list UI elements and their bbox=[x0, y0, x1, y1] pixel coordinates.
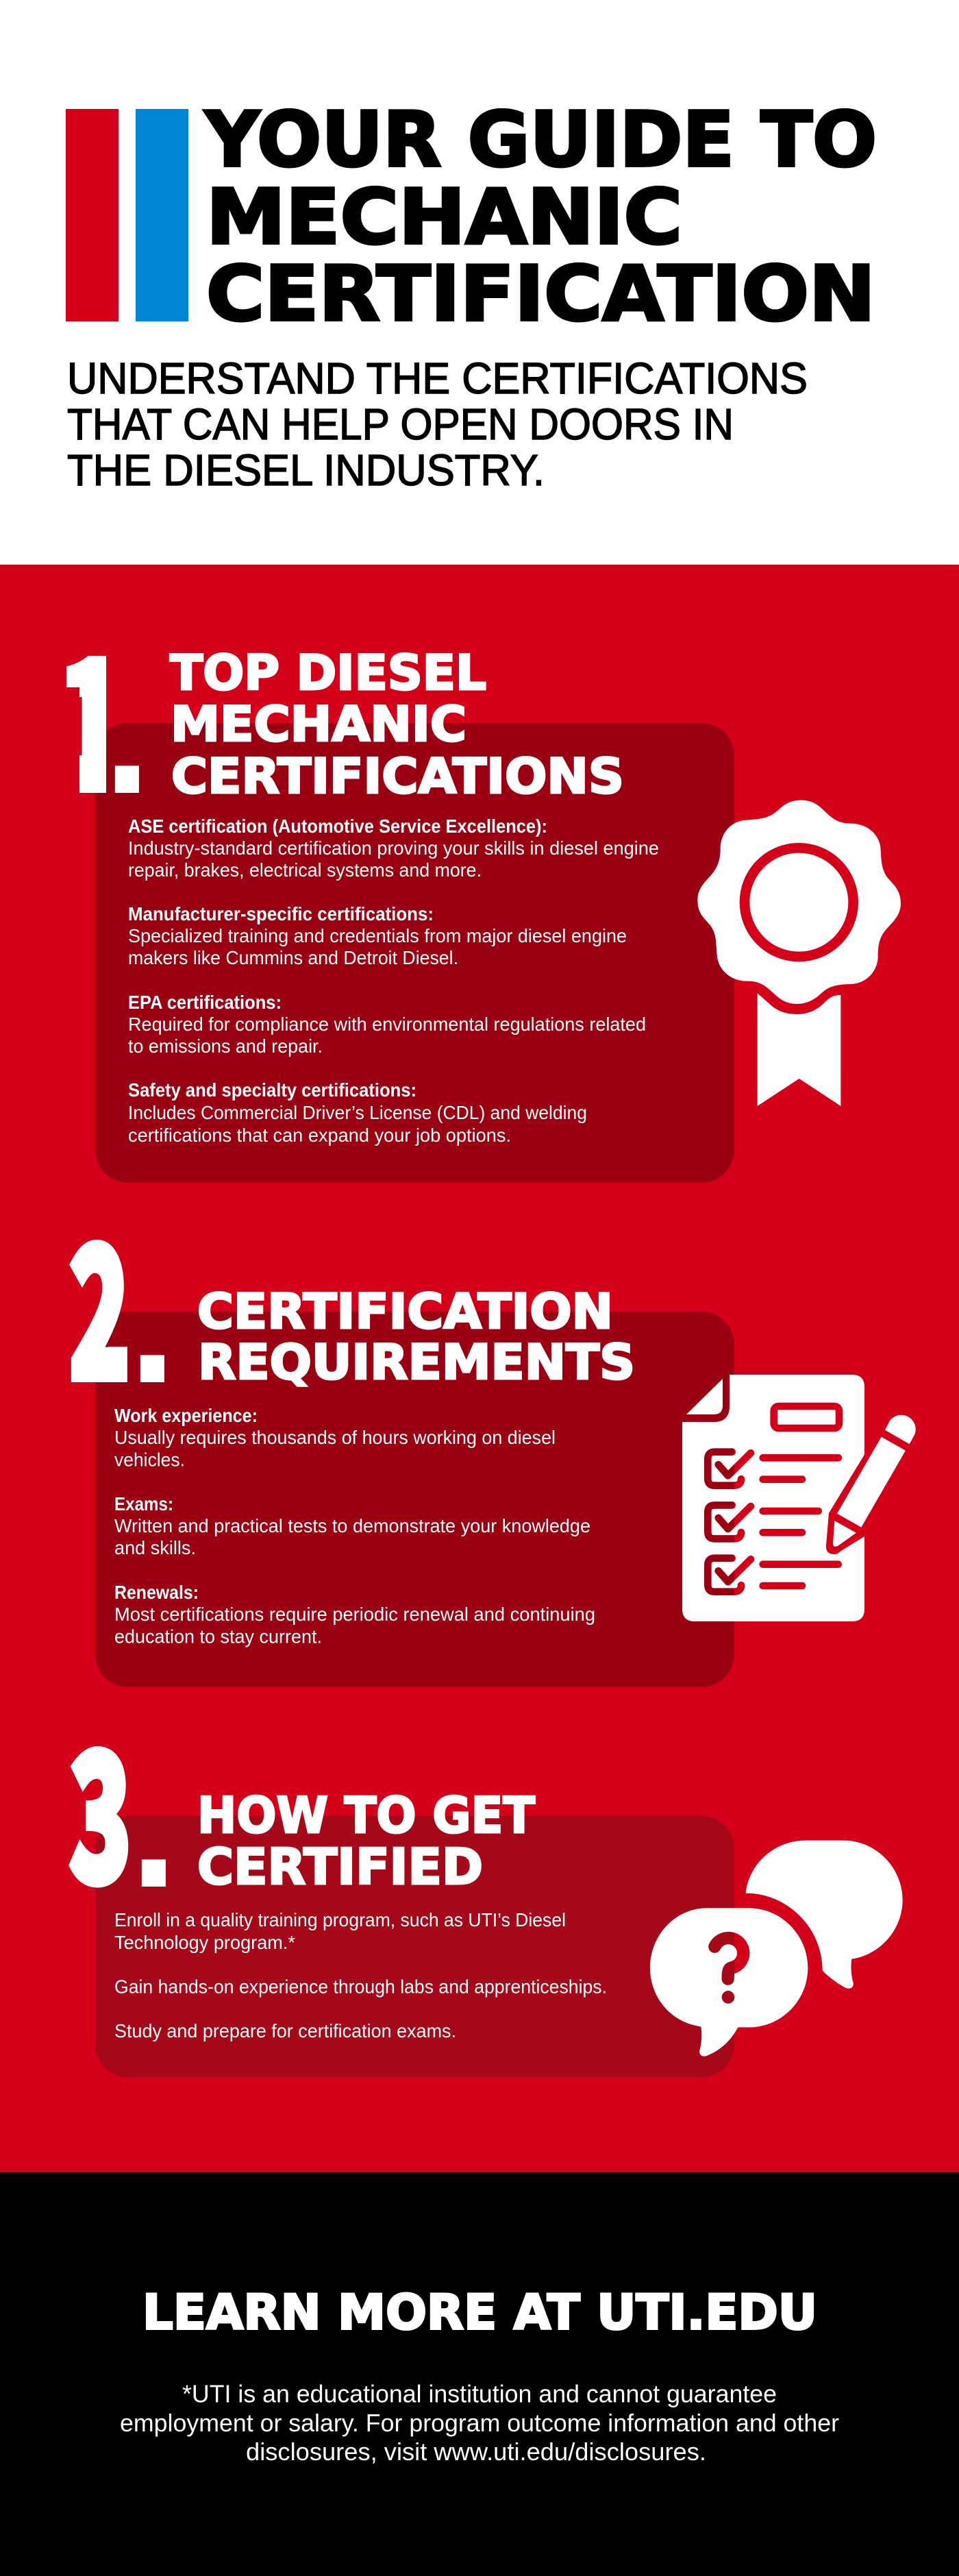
header section bbox=[0, 0, 959, 565]
title: CERTIFICATION bbox=[206, 250, 875, 339]
section 2: certification requirements bbox=[69, 1168, 916, 1687]
text: certification list: to emissions and repair. bbox=[128, 1035, 323, 1057]
disclaimer: employment or salary. For program outcome information and other bbox=[120, 2409, 839, 2437]
text: requirements list: Usually requires thousands of hours working on diesel bbox=[114, 1427, 556, 1448]
text: steps list: Gain hands-on experience through labs and apprenticeships. bbox=[114, 1976, 607, 1998]
subtitle: THE DIESEL INDUSTRY. bbox=[67, 445, 545, 495]
number 3: 3 bbox=[69, 1677, 132, 1933]
text: steps list: Technology program.* bbox=[114, 1932, 295, 1953]
icon: speech bubbles with question mark bbox=[650, 1841, 903, 2057]
text: certification list: ASE certification (Automotive Service Excellence): bbox=[128, 815, 547, 837]
text: requirements list: Most certifications require periodic renewal and continuing bbox=[114, 1604, 595, 1625]
number 3: . bbox=[130, 1722, 177, 1926]
call to action: LEARN MORE AT UTI.EDU bbox=[142, 2285, 817, 2341]
footer bbox=[0, 2172, 959, 2576]
heading: how to get certified: CERTIFIED bbox=[197, 1838, 483, 1896]
title bbox=[203, 96, 877, 339]
panel: section 2 bbox=[95, 1312, 734, 1687]
text: certification list: Industry-standard certification proving your skills in diesel engine bbox=[128, 837, 659, 859]
heading: top diesel mechanic certifications: MECHANIC bbox=[171, 696, 466, 752]
text: requirements list: vehicles. bbox=[114, 1449, 185, 1471]
text: requirements list: Work experience: bbox=[114, 1405, 258, 1426]
text: certification list: Manufacturer-specific certifications: bbox=[128, 903, 434, 924]
text: requirements list: Written and practical tests to demonstrate your knowledge bbox=[114, 1515, 590, 1536]
text: requirements list: education to stay current. bbox=[114, 1626, 322, 1647]
red accent bar bbox=[66, 109, 119, 321]
heading: how to get certified: HOW TO GET bbox=[197, 1787, 535, 1844]
icon: checklist with pencil bbox=[682, 1375, 916, 1621]
heading: top diesel mechanic certifications: TOP DIESEL bbox=[170, 645, 486, 701]
title: YOUR GUIDE TO bbox=[203, 96, 877, 184]
heading: certification requirements: CERTIFICATION bbox=[197, 1284, 613, 1340]
text: certification list: Specialized training and credentials from major diesel engine bbox=[128, 925, 627, 946]
section 3: how to get certified bbox=[68, 1746, 903, 2077]
text: requirements list: and skills. bbox=[114, 1537, 196, 1558]
text: certification list: repair, brakes, electrical systems and more. bbox=[128, 859, 482, 881]
text: steps list: Study and prepare for certification exams. bbox=[114, 2020, 456, 2041]
text: steps list: Enroll in a quality training program, such as UTI’s Diesel bbox=[114, 1909, 566, 1930]
text: certification list: Required for compliance with environmental regulations related bbox=[128, 1014, 646, 1035]
disclaimer: *UTI is an educational institution and cannot guarantee bbox=[182, 2380, 777, 2408]
heading: certification requirements bbox=[197, 1284, 635, 1390]
text: requirements list: Exams: bbox=[114, 1493, 173, 1514]
number 2: 2 bbox=[69, 1168, 130, 1431]
heading: how to get certified bbox=[197, 1787, 535, 1896]
text: requirements list bbox=[114, 1405, 595, 1647]
text: steps list bbox=[114, 1909, 607, 2041]
text: certification list: Includes Commercial Driver’s License (CDL) and welding bbox=[128, 1102, 587, 1123]
text: requirements list: Renewals: bbox=[114, 1582, 199, 1603]
disclaimer bbox=[120, 2380, 839, 2466]
subtitle bbox=[67, 354, 808, 495]
heading: top diesel mechanic certifications: CERTIFICATIONS bbox=[171, 748, 624, 805]
number 2: . bbox=[129, 1218, 176, 1421]
disclaimer: disclosures, visit www.uti.edu/disclosures. bbox=[246, 2438, 706, 2466]
number 1: 1 bbox=[58, 585, 130, 837]
heading: top diesel mechanic certifications bbox=[170, 645, 624, 805]
subtitle: UNDERSTAND THE CERTIFICATIONS bbox=[67, 354, 808, 403]
panel: section 3 bbox=[95, 1816, 734, 2077]
icon: award rosette bbox=[697, 800, 901, 1106]
panel: section 1 bbox=[95, 723, 734, 1183]
text: certification list: Safety and specialty certifications: bbox=[128, 1079, 416, 1101]
text: certification list: certifications that can expand your job options. bbox=[128, 1125, 511, 1146]
text: certification list: makers like Cummins and Detroit Diesel. bbox=[128, 947, 458, 968]
red background band bbox=[0, 565, 959, 2172]
text: certification list: EPA certifications: bbox=[128, 992, 282, 1013]
number 1: . bbox=[103, 628, 151, 832]
subtitle: THAT CAN HELP OPEN DOORS IN bbox=[67, 400, 734, 449]
section 1: top certifications bbox=[58, 585, 901, 1183]
blue accent bar bbox=[136, 109, 188, 321]
heading: certification requirements: REQUIREMENTS bbox=[198, 1334, 635, 1390]
title: MECHANIC bbox=[206, 173, 682, 262]
text: certification list bbox=[128, 815, 659, 1146]
number 1 bbox=[66, 656, 139, 793]
